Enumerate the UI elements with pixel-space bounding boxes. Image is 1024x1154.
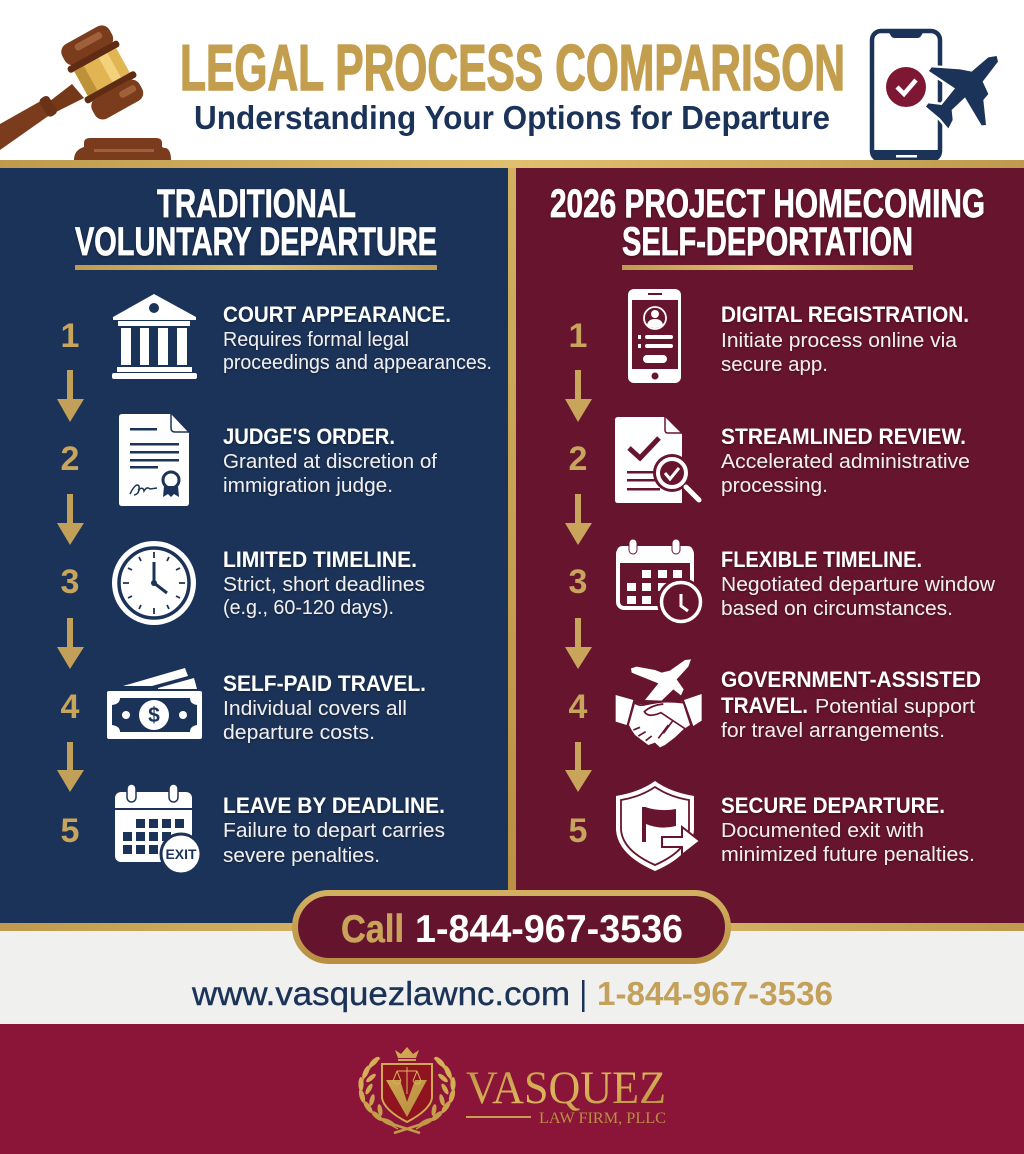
call button: 1-844-967-3536 bbox=[415, 908, 683, 951]
heading underline bbox=[75, 265, 437, 270]
header bbox=[0, 21, 998, 160]
step 5 text: Failure to depart carries bbox=[223, 819, 445, 842]
step 1 text bbox=[223, 302, 492, 374]
website and phone line: www.vasquezlawnc.com bbox=[191, 975, 570, 1012]
call button bbox=[295, 893, 728, 961]
icon: cash: $ bbox=[148, 704, 160, 727]
step 3 text: Negotiated departure window bbox=[721, 573, 995, 596]
step numbers left: 1 bbox=[61, 317, 79, 355]
step numbers left: 2 bbox=[61, 440, 79, 478]
step numbers right: 1 bbox=[569, 317, 587, 355]
step 2 text: Accelerated administrative bbox=[721, 450, 970, 473]
icon: calendar with clock bbox=[617, 539, 705, 626]
step 4 text bbox=[223, 671, 426, 744]
icon: cash bbox=[107, 668, 202, 739]
footer band bbox=[0, 1024, 1024, 1154]
gold frame bars bbox=[0, 160, 1024, 925]
laurel right bbox=[416, 1055, 456, 1129]
step 3 text bbox=[721, 547, 995, 620]
logo crest bbox=[358, 1047, 456, 1133]
step 5 text: minimized future penalties. bbox=[721, 843, 975, 866]
scales bbox=[393, 1067, 421, 1094]
step 5 text: severe penalties. bbox=[223, 844, 380, 867]
laurel left bbox=[358, 1055, 398, 1129]
icon: courthouse bbox=[112, 294, 197, 379]
step 2 text: Granted at discretion of bbox=[223, 450, 437, 473]
step 1 text: secure app. bbox=[721, 353, 828, 376]
subtitle: Understanding Your Options for Departure bbox=[194, 99, 830, 136]
step 3 text: (e.g., 60-120 days). bbox=[223, 596, 394, 619]
arrows left bbox=[57, 370, 84, 792]
step 4 text: SELF-PAID TRAVEL. bbox=[223, 671, 426, 696]
step 2 text: JUDGE'S ORDER. bbox=[223, 424, 395, 449]
icon: gavel bbox=[0, 21, 171, 160]
firm name: LAW FIRM, PLLC bbox=[539, 1110, 666, 1127]
icon: plane and handshake bbox=[616, 659, 702, 747]
icon: phone registration bbox=[628, 289, 681, 383]
step numbers left: 5 bbox=[61, 812, 79, 850]
icon: clock bbox=[112, 541, 196, 625]
panel: 2026 project homecoming self-deportation bbox=[516, 168, 1024, 925]
step numbers left: 3 bbox=[61, 563, 79, 601]
step 3 text bbox=[223, 547, 425, 619]
icon: exit calendar bbox=[115, 784, 201, 874]
step 1 text: proceedings and appearances. bbox=[223, 351, 492, 374]
icon: phone and plane bbox=[872, 31, 998, 160]
step 1 text: Requires formal legal bbox=[223, 328, 409, 351]
step 3 text: LIMITED TIMELINE. bbox=[223, 547, 417, 572]
crown bbox=[395, 1047, 419, 1061]
step 1 text bbox=[721, 302, 969, 376]
step 5 text: Documented exit with bbox=[721, 819, 924, 842]
call button: Call bbox=[341, 908, 404, 951]
step numbers right: 2 bbox=[569, 440, 587, 478]
step 2 text: immigration judge. bbox=[223, 474, 393, 497]
step numbers right: 3 bbox=[569, 563, 587, 601]
icon: shield with flag bbox=[616, 781, 700, 871]
step 4 text: for travel arrangements. bbox=[721, 719, 945, 742]
step 4 text bbox=[721, 667, 981, 742]
step 2 text: processing. bbox=[721, 474, 828, 497]
shield bbox=[382, 1064, 432, 1122]
icon: exit calendar: EXIT bbox=[166, 847, 197, 862]
icon: document review bbox=[615, 417, 699, 503]
step 5 text: SECURE DEPARTURE. bbox=[721, 793, 945, 818]
step 2 text bbox=[223, 424, 437, 497]
website and phone line bbox=[191, 975, 833, 1012]
arrows right bbox=[565, 370, 592, 792]
step 1 text: DIGITAL REGISTRATION. bbox=[721, 302, 969, 327]
step 4 text: departure costs. bbox=[223, 721, 375, 744]
step numbers right bbox=[569, 317, 588, 850]
step 3 text: based on circumstances. bbox=[721, 597, 953, 620]
contact strip bbox=[0, 893, 1024, 1024]
step 2 text: STREAMLINED REVIEW. bbox=[721, 424, 966, 449]
panel: traditional voluntary departure bbox=[0, 168, 508, 925]
heading underline bbox=[622, 265, 913, 270]
step 5 text bbox=[223, 793, 445, 867]
heading: project homecoming: SELF-DEPORTATION bbox=[622, 220, 913, 264]
step 4 text: Individual covers all bbox=[223, 697, 407, 720]
firm name: VASQUEZ bbox=[466, 1062, 666, 1114]
step numbers left: 4 bbox=[61, 688, 80, 726]
step 5 text: LEAVE BY DEADLINE. bbox=[223, 793, 445, 818]
website and phone line: 1-844-967-3536 bbox=[597, 975, 833, 1012]
step 4 text: GOVERNMENT-ASSISTED bbox=[721, 667, 981, 692]
step 4 text: TRAVEL. bbox=[721, 693, 808, 718]
laurel ribbon bbox=[392, 1124, 422, 1133]
heading: traditional voluntary departure bbox=[75, 182, 437, 264]
step numbers right: 5 bbox=[569, 812, 587, 850]
step 2 text bbox=[721, 424, 970, 497]
step numbers right: 4 bbox=[569, 688, 588, 726]
step 1 text: COURT APPEARANCE. bbox=[223, 302, 451, 327]
step 5 text bbox=[721, 793, 975, 866]
step 3 text: Strict, short deadlines bbox=[223, 573, 425, 596]
step 4 text: Potential support bbox=[815, 695, 975, 718]
heading: traditional voluntary departure: TRADITIONAL bbox=[157, 182, 356, 226]
shield V bbox=[386, 1080, 427, 1117]
step 3 text: FLEXIBLE TIMELINE. bbox=[721, 547, 922, 572]
step 1 text: Initiate process online via bbox=[721, 329, 958, 352]
heading: project homecoming bbox=[550, 182, 985, 264]
heading: traditional voluntary departure: VOLUNTARY DEPARTURE bbox=[75, 220, 437, 264]
step numbers left bbox=[61, 317, 80, 850]
icon: signed order document bbox=[119, 414, 189, 506]
